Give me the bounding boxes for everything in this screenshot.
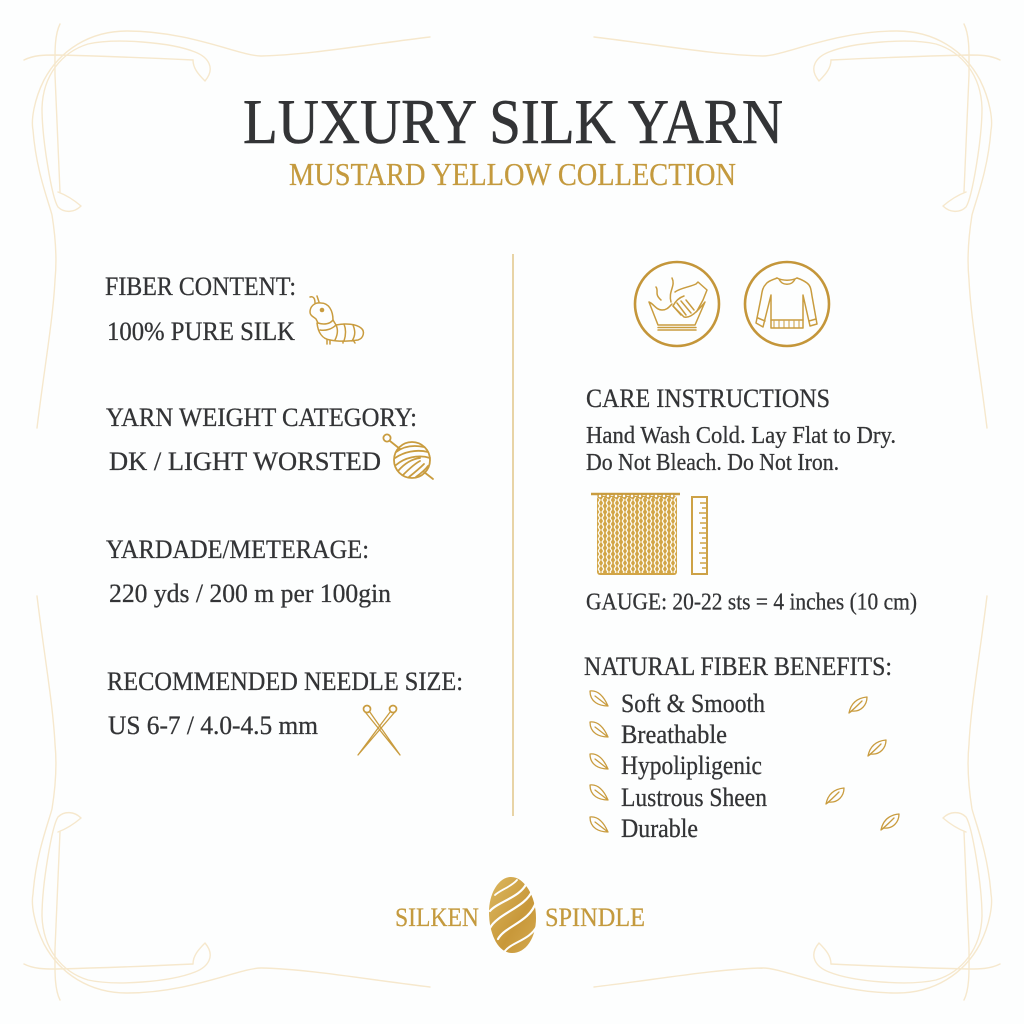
title: LUXURY SILK YARN — [243, 87, 783, 157]
benefit: durable: Durable — [621, 814, 698, 843]
center divider — [512, 254, 514, 816]
needle size value: US 6-7 / 4.0-4.5 mm — [108, 711, 318, 740]
subtitle: MUSTARD YELLOW COLLECTION — [289, 156, 736, 192]
icon: sweater — [745, 262, 829, 346]
benefit: lustrous sheen: Lustrous Sheen — [621, 783, 767, 812]
panel: yarn specifications — [105, 272, 463, 755]
fiber content value: 100% PURE SILK — [107, 317, 295, 346]
fiber content label: FIBER CONTENT: — [105, 272, 296, 301]
care instructions heading: CARE INSTRUCTIONS — [586, 384, 830, 413]
icon: hand wash — [635, 262, 719, 346]
yarn weight value: DK / LIGHT WORSTED — [109, 447, 381, 476]
brand name left: SILKEN — [395, 903, 479, 932]
ruler — [692, 497, 707, 574]
icon: knit swatch and ruler — [591, 494, 707, 575]
benefit: hypolipligenic: Hypolipligenic — [621, 751, 762, 780]
benefit: soft and smooth: Soft & Smooth — [621, 689, 765, 718]
benefit: durable — [590, 814, 698, 843]
benefit: breathable: Breathable — [621, 720, 727, 749]
brand logo — [395, 877, 645, 953]
icon: yarn ball and needle — [383, 434, 433, 479]
care instructions text: Do Not Bleach. Do Not Iron. — [586, 450, 839, 476]
benefits list — [590, 689, 767, 843]
needle size label: RECOMMENDED NEEDLE SIZE: — [107, 667, 463, 696]
yardage label: YARDADE/METERAGE: — [106, 535, 369, 564]
knit swatch — [591, 494, 680, 575]
yarn weight label: YARN WEIGHT CATEGORY: — [106, 403, 417, 432]
benefits heading: NATURAL FIBER BENEFITS: — [584, 652, 892, 681]
panel: care icons — [635, 262, 829, 346]
brand name right: SPINDLE — [545, 903, 645, 932]
yardage value: 220 yds / 200 m per 100gin — [109, 579, 391, 608]
floating leaves — [826, 697, 899, 830]
gauge text: GAUGE: 20-22 sts = 4 inches (10 cm) — [586, 590, 917, 616]
icon: silkworm — [310, 296, 363, 344]
care instructions text — [586, 423, 896, 476]
icon: crossed knitting needles — [358, 706, 400, 755]
icon: silk cocoon — [489, 877, 537, 953]
care instructions text: Hand Wash Cold. Lay Flat to Dry. — [586, 423, 896, 449]
